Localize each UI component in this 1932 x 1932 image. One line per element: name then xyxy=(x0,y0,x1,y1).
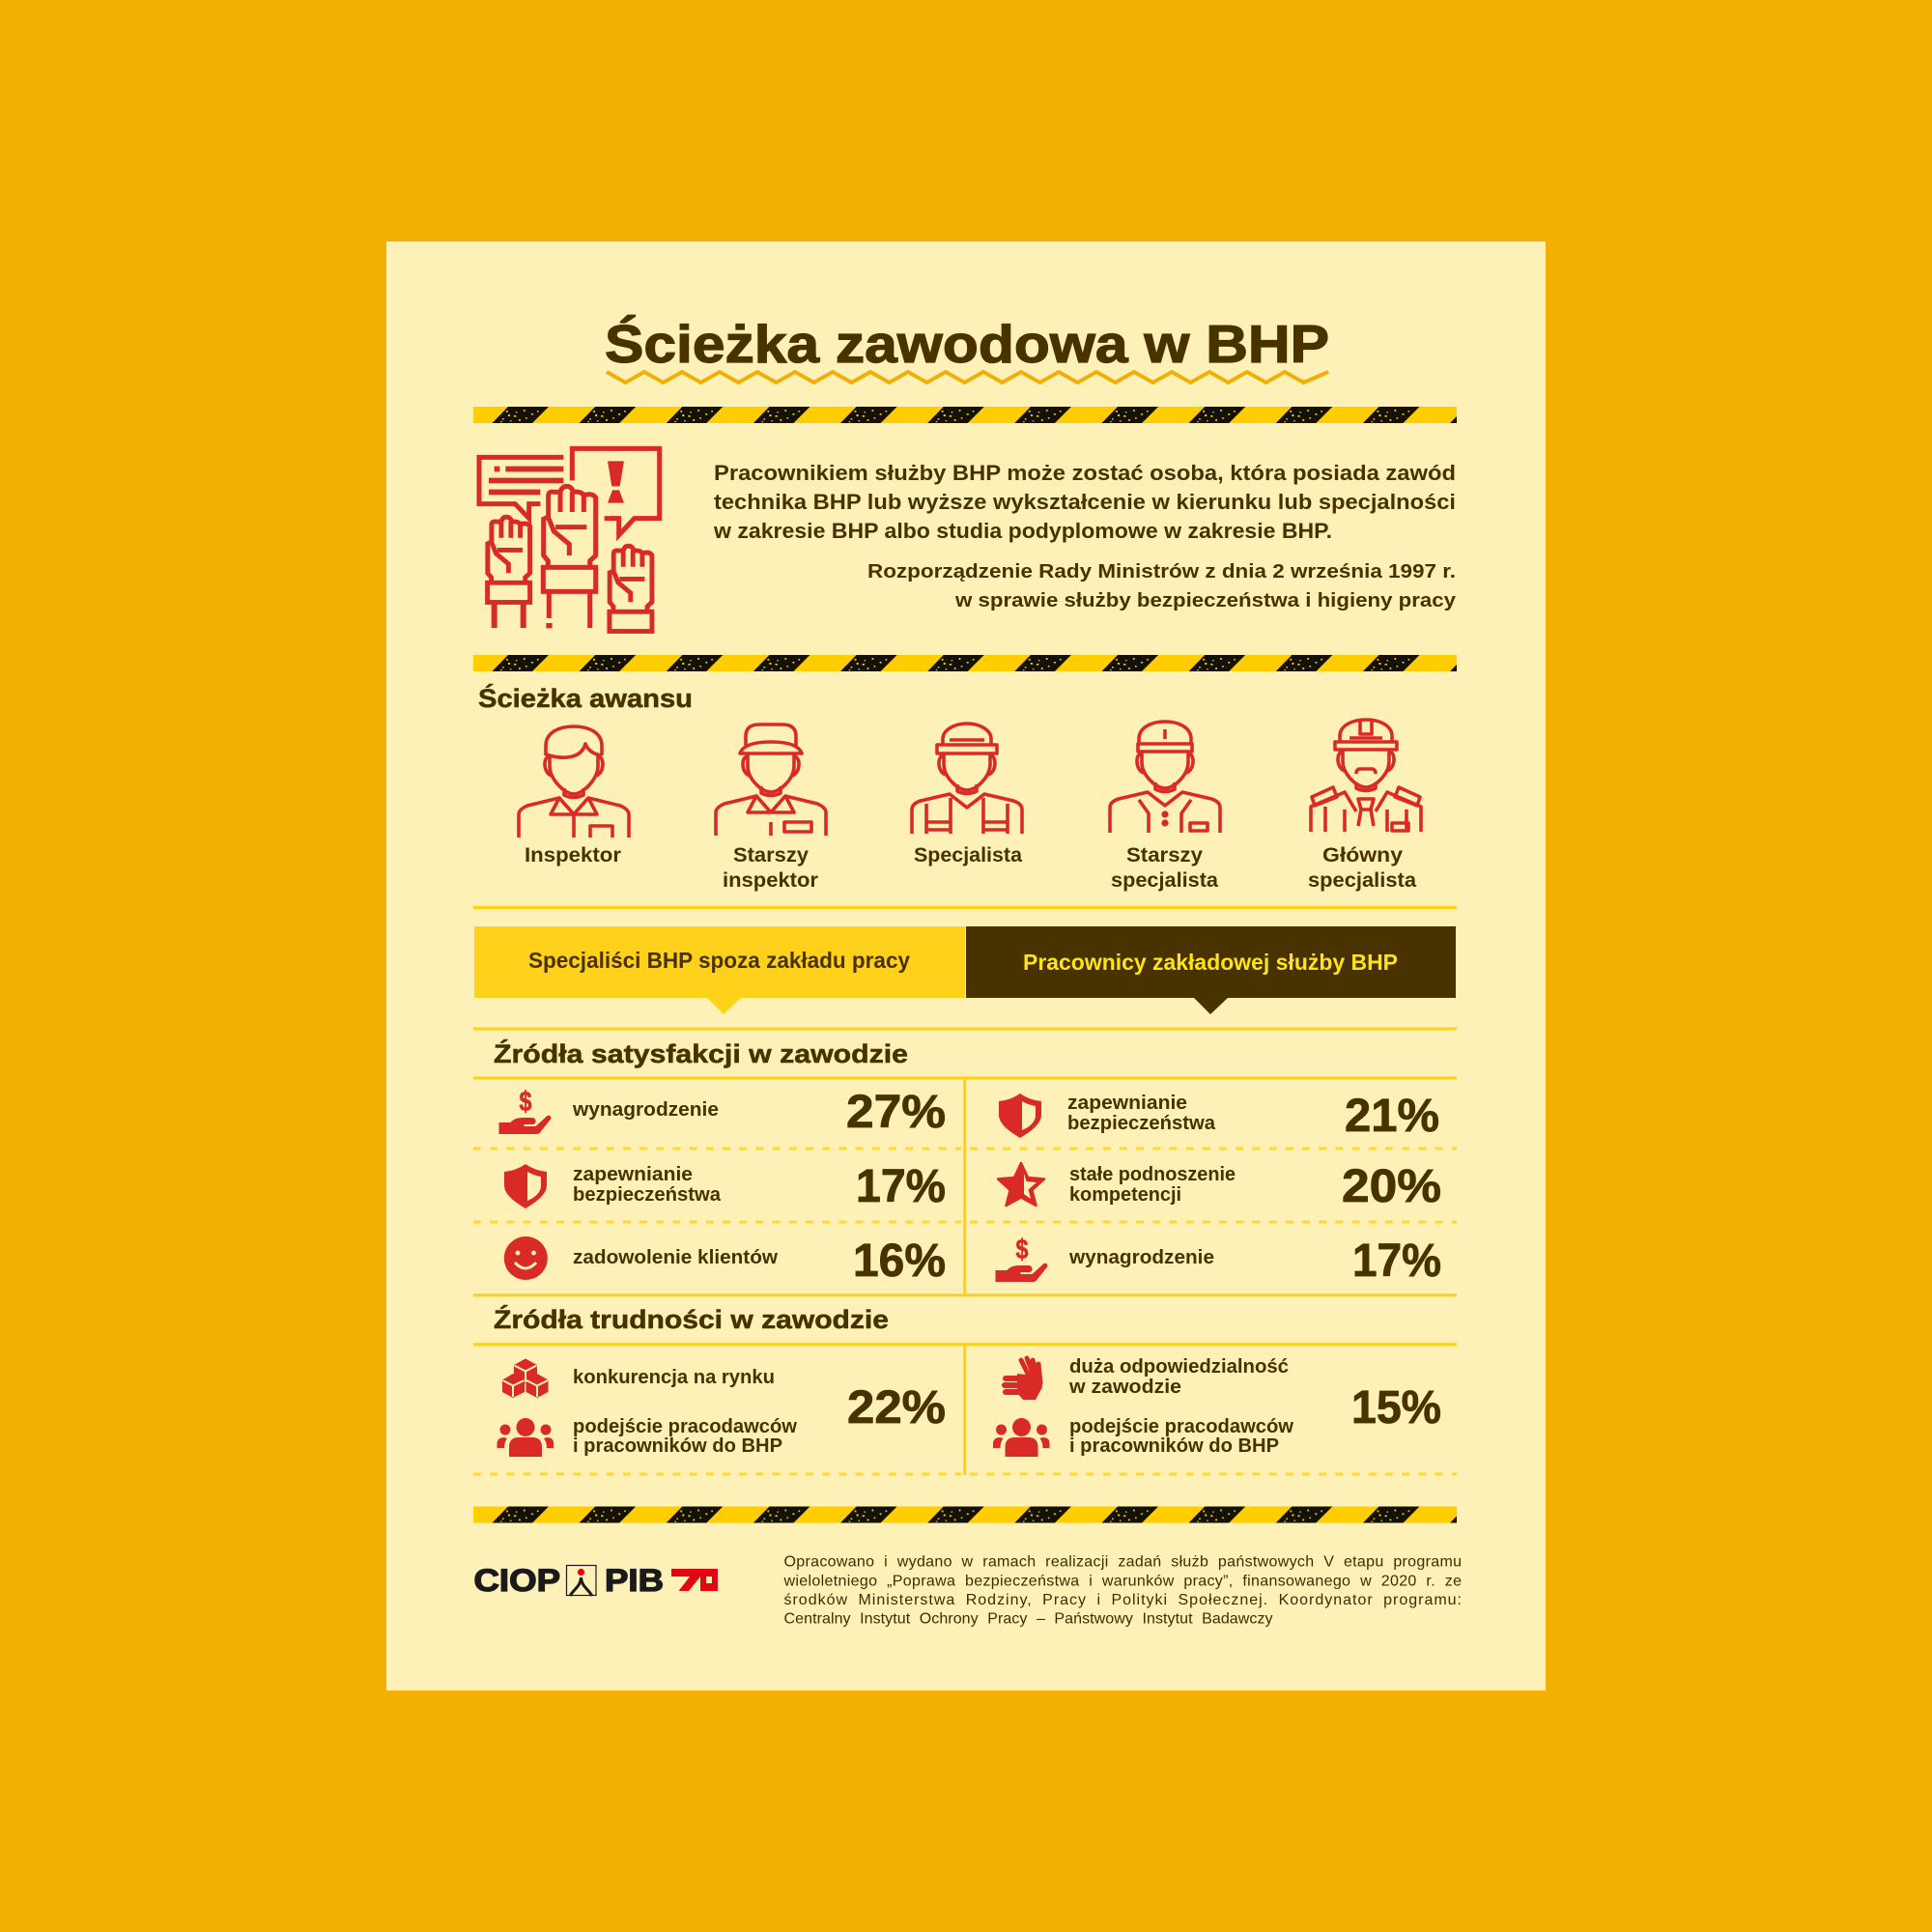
satisfaction: in-house — safety: zapewnianie xyxy=(1067,1093,1187,1114)
tab: external specialists: Specjaliści BHP spoza zakładu pracy xyxy=(528,948,910,973)
difficulties: in-house: 15% xyxy=(1351,1382,1441,1434)
heading: career path: Ścieżka awansu xyxy=(478,683,693,713)
icon: senior specialist xyxy=(1110,722,1220,833)
satisfaction: external — safety xyxy=(504,1161,946,1212)
satisfaction: external — safety: bezpieczeństwa xyxy=(573,1184,722,1206)
career step: Starszy inspektor: inspektor xyxy=(723,869,818,892)
satisfaction: in-house — competence: kompetencji xyxy=(1069,1184,1181,1206)
footer credits: Opracowano i wydano w ramach realizacji zadań służb państwowych V etapu programu xyxy=(784,1553,1462,1571)
satisfaction: external — clients xyxy=(504,1236,946,1287)
icon: shield xyxy=(999,1094,1041,1138)
icon: specialist xyxy=(912,724,1022,834)
satisfaction: in-house — competence xyxy=(998,1161,1441,1212)
satisfaction: external — salary xyxy=(498,1087,946,1138)
satisfaction: in-house — salary xyxy=(995,1235,1441,1287)
legal citation: w sprawie służby bezpieczeństwa i higieny pracy xyxy=(954,590,1457,611)
icon: smiley xyxy=(504,1236,548,1280)
difficulties: in-house: w zawodzie xyxy=(1068,1377,1181,1398)
icon: hand with dollar xyxy=(498,1087,551,1134)
satisfaction: external — safety: 17% xyxy=(856,1161,946,1212)
footer credits: Centralny Instytut Ochrony Pracy – Państwowy Instytut Badawczy xyxy=(784,1611,1273,1627)
tab: external specialists xyxy=(474,926,965,1014)
icon: hand with dollar xyxy=(995,1235,1047,1282)
career step: Główny specjalista xyxy=(1308,720,1421,892)
icon: people group xyxy=(497,1418,554,1457)
hazard stripe 3 xyxy=(473,1507,1457,1522)
intro paragraph xyxy=(713,461,1456,543)
title: Ścieżka zawodowa w BHP xyxy=(605,314,1329,374)
intro paragraph: w zakresie BHP albo studia podyplomowe w zakresie BHP. xyxy=(713,519,1332,543)
satisfaction: in-house — salary: 17% xyxy=(1352,1236,1441,1287)
logo: CIOP-PIB 70 xyxy=(473,1563,718,1598)
career step: Inspektor xyxy=(519,726,629,867)
legal citation xyxy=(867,561,1457,611)
tab: in-house service xyxy=(966,926,1456,1014)
satisfaction: external — salary: 27% xyxy=(846,1087,946,1138)
difficulties: in-house: podejście pracodawców xyxy=(1069,1416,1293,1437)
icon: hands xyxy=(1005,1358,1042,1400)
difficulties: in-house: i pracowników do BHP xyxy=(1069,1435,1279,1457)
difficulties: in-house: duża odpowiedzialność xyxy=(1069,1356,1289,1378)
icon: raised hands with speech bubbles xyxy=(479,448,660,631)
difficulties: external: i pracowników do BHP xyxy=(573,1435,782,1457)
satisfaction: in-house — safety: 21% xyxy=(1345,1091,1439,1142)
career step: Starszy specjalista xyxy=(1110,722,1220,892)
career step: Specjalista xyxy=(912,724,1022,867)
difficulties: external xyxy=(497,1358,946,1457)
icon: hand with dollar: $ xyxy=(1016,1235,1028,1265)
icon: star xyxy=(998,1163,1044,1206)
difficulties: external: konkurencja na rynku xyxy=(573,1367,775,1388)
intro paragraph: Pracownikiem służby BHP może zostać osoba, która posiada zawód xyxy=(714,461,1456,485)
icon: chief specialist xyxy=(1311,720,1421,832)
icon: cubes xyxy=(502,1358,549,1398)
tab: in-house service: Pracownicy zakładowej służby BHP xyxy=(1023,950,1398,975)
satisfaction: external — safety: zapewnianie xyxy=(573,1164,693,1185)
satisfaction: in-house — safety xyxy=(999,1091,1439,1142)
icon: people group xyxy=(993,1418,1049,1457)
panel: main card xyxy=(386,242,1546,1690)
icon: hand with dollar: $ xyxy=(520,1087,531,1118)
icon: senior inspector xyxy=(716,724,826,836)
title zigzag underline xyxy=(607,372,1328,383)
footer credits: wieloletniego „Poprawa bezpieczeństwa i warunków pracy”, finansowanego w 2020 r. ze xyxy=(782,1573,1462,1590)
career step: Starszy inspektor xyxy=(716,724,826,892)
difficulties: in-house xyxy=(993,1356,1441,1457)
difficulties: external: 22% xyxy=(847,1382,946,1434)
career step: Główny specjalista: Główny xyxy=(1322,844,1403,867)
satisfaction: in-house — safety: bezpieczeństwa xyxy=(1067,1113,1216,1134)
career step: Starszy specjalista: Starszy xyxy=(1126,844,1203,867)
career step: Starszy specjalista: specjalista xyxy=(1111,869,1218,892)
satisfaction: in-house — salary: wynagrodzenie xyxy=(1068,1247,1214,1268)
heading: sources of difficulty: Źródła trudności w zawodzie xyxy=(494,1304,889,1334)
career step: Starszy inspektor: Starszy xyxy=(733,844,809,867)
satisfaction: in-house — competence: stałe podnoszenie xyxy=(1069,1164,1236,1185)
career step: Specjalista: Specjalista xyxy=(914,844,1022,867)
footer credits xyxy=(782,1553,1462,1627)
hazard stripe 2 xyxy=(473,655,1457,671)
satisfaction: external — salary: wynagrodzenie xyxy=(572,1099,719,1121)
satisfaction: external — clients: 16% xyxy=(853,1236,946,1287)
icon: inspector xyxy=(519,726,629,838)
satisfaction: in-house — competence: 20% xyxy=(1342,1161,1441,1212)
heading: sources of satisfaction: Źródła satysfakcji w zawodzie xyxy=(494,1038,908,1068)
logo: CIOP-PIB 70: PIB xyxy=(605,1563,664,1598)
footer credits: środków Ministerstwa Rodziny, Pracy i Polityki Społecznej. Koordynator programu: xyxy=(784,1592,1462,1608)
icon: shield xyxy=(504,1164,547,1208)
hazard stripe 1 xyxy=(473,407,1457,423)
legal citation: Rozporządzenie Rady Ministrów z dnia 2 września 1997 r. xyxy=(867,561,1456,582)
career step: Inspektor: Inspektor xyxy=(525,844,621,867)
satisfaction: external — clients: zadowolenie klientów xyxy=(573,1247,778,1268)
difficulties: external: podejście pracodawców xyxy=(573,1416,797,1437)
career step: Główny specjalista: specjalista xyxy=(1308,869,1416,892)
logo: CIOP-PIB 70: CIOP xyxy=(473,1563,560,1598)
intro paragraph: technika BHP lub wyższe wykształcenie w kierunku lub specjalności xyxy=(714,490,1456,514)
